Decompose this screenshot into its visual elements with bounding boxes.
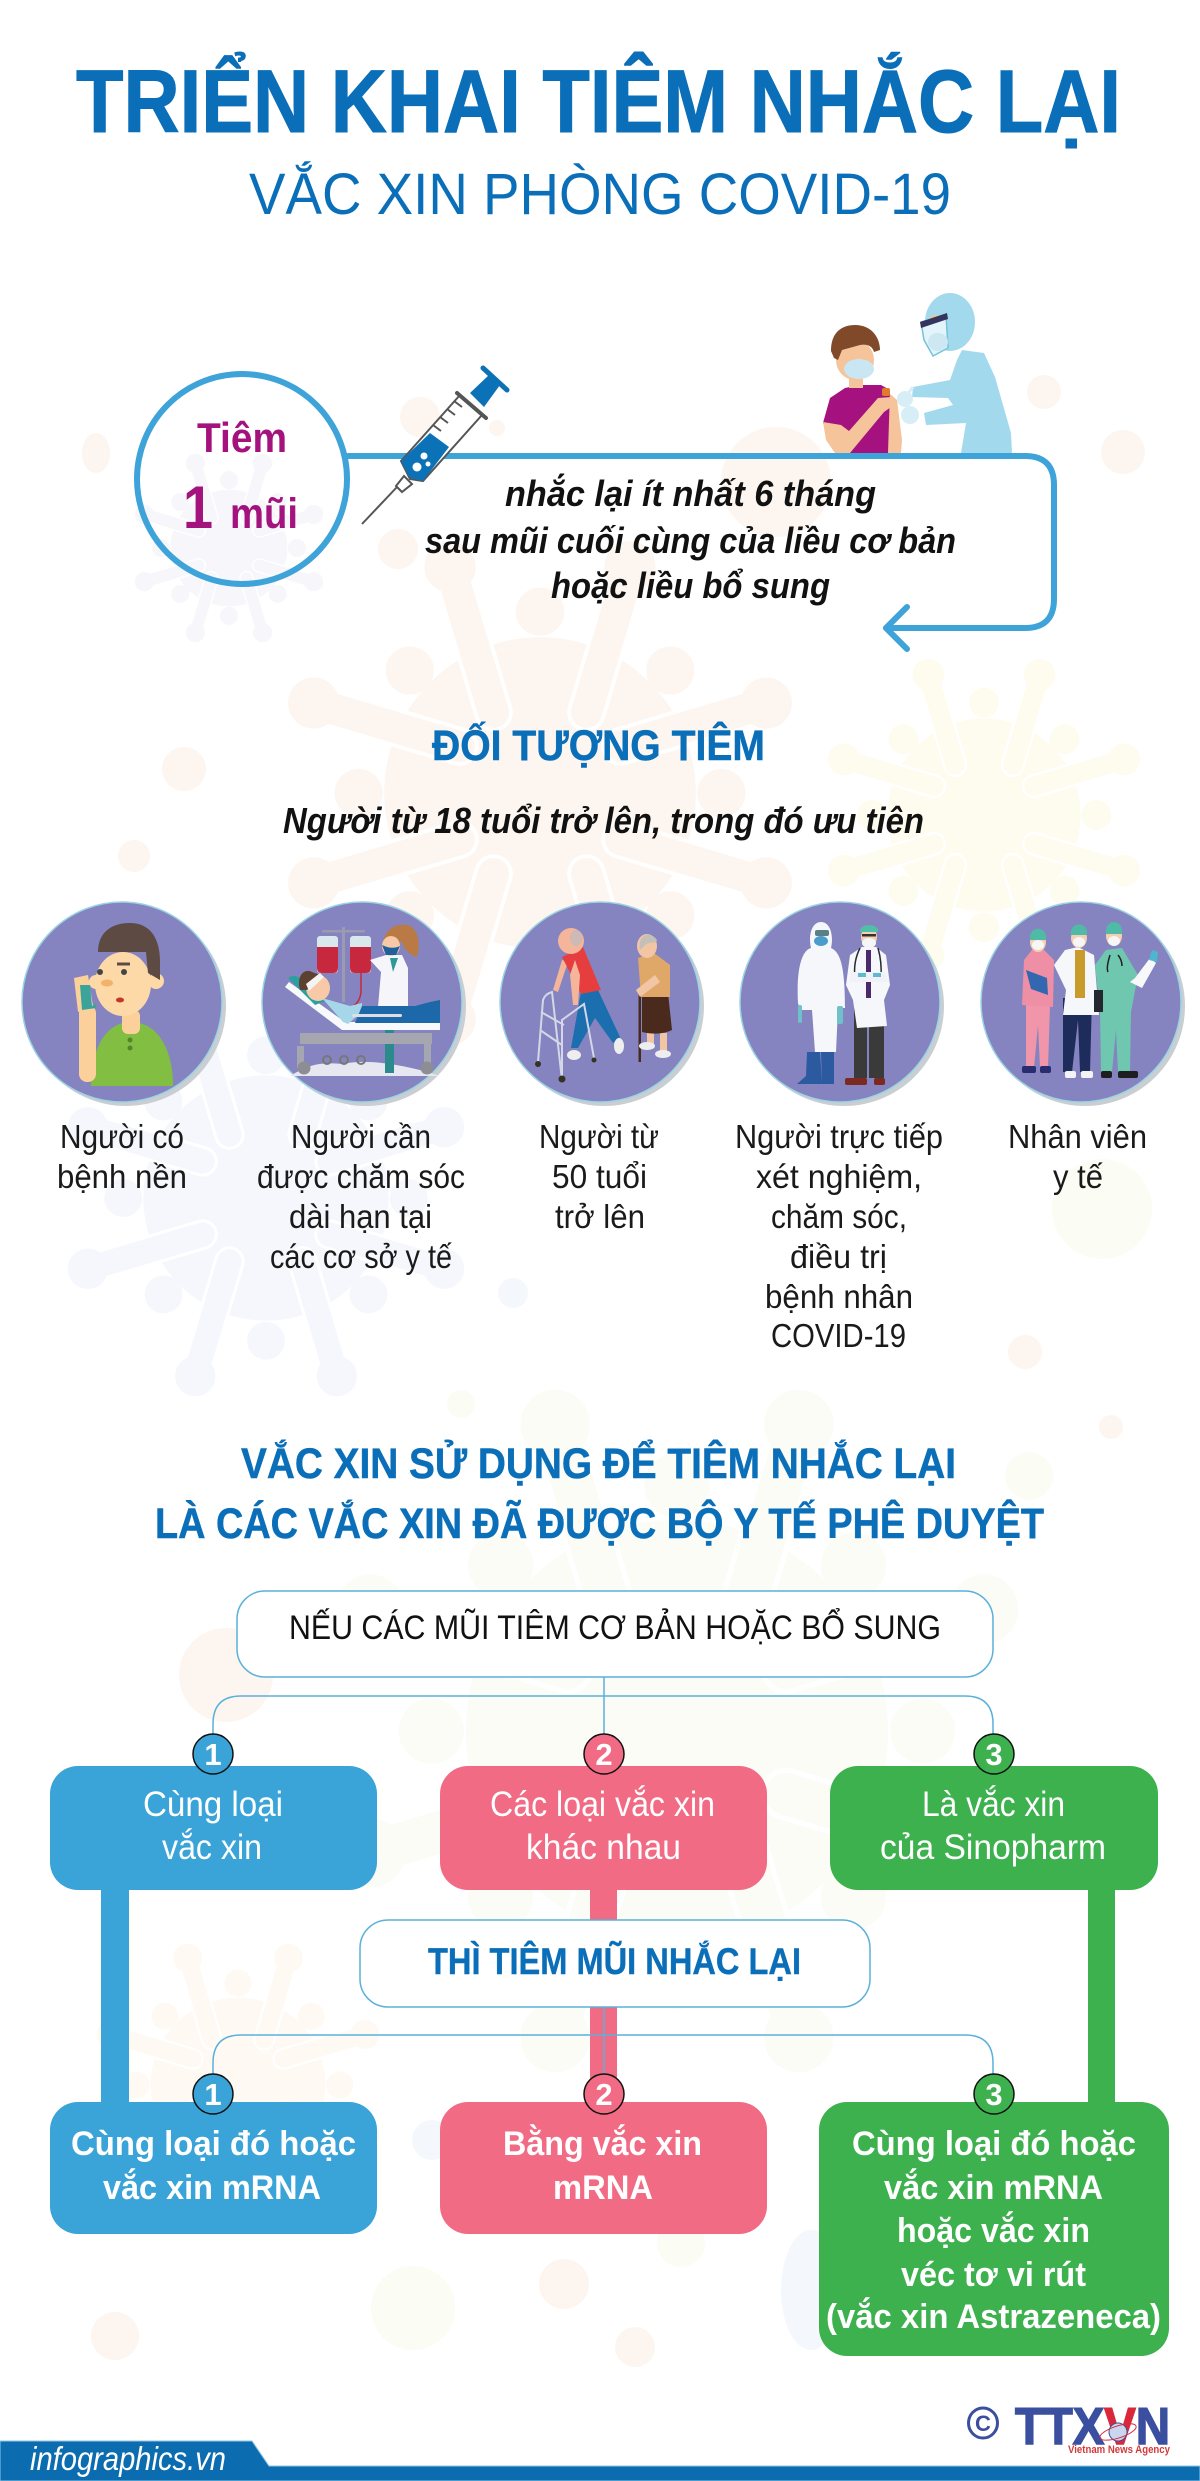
panel: same vaccine: Cùng loại xyxy=(143,1785,283,1824)
text block: booster timing xyxy=(425,472,956,606)
panel: long-term care xyxy=(257,902,466,1275)
panel: result mRNA xyxy=(440,2102,767,2234)
icon: three health workers xyxy=(981,902,1185,1106)
icon: patient in bed with nurse xyxy=(262,902,466,1106)
text block: booster timing: sau mũi cuối cùng của liều cơ bản xyxy=(425,520,956,561)
logo: TTXVN: C xyxy=(975,2411,991,2436)
label xyxy=(539,1118,659,1235)
label: Người có xyxy=(60,1118,184,1155)
icon: elderly people xyxy=(500,902,704,1106)
heading: approved vaccines: LÀ CÁC VẮC XIN ĐÃ ĐƯỢC BỘ Y TẾ PHÊ DUYỆT xyxy=(155,1499,1044,1548)
footer: brand band xyxy=(0,2440,1200,2481)
panel: medical staff xyxy=(981,902,1185,1195)
badge: bottom 2 xyxy=(584,2074,624,2114)
panel: result Astrazeneca xyxy=(819,2102,1169,2356)
panel: different vaccines xyxy=(440,1766,767,1890)
badge: top 1 xyxy=(193,1734,233,1774)
panel: result Astrazeneca: hoặc vắc xin xyxy=(897,2212,1090,2250)
panel: result Astrazeneca: véc tơ vi rút xyxy=(901,2256,1086,2294)
heading: approved vaccines xyxy=(155,1439,1044,1548)
panel: condition box xyxy=(237,1591,993,1677)
badge: top 3 xyxy=(974,1734,1014,1774)
label: xét nghiệm, xyxy=(756,1158,922,1195)
badge: bottom 1 xyxy=(193,2074,233,2114)
callout: one dose circle: Tiêm xyxy=(197,414,287,461)
text block: target group intro: Người từ 18 tuổi trở lên, trong đó ưu tiên xyxy=(283,800,924,841)
callout: one dose circle xyxy=(137,374,347,584)
panel: Sinopharm: Là vắc xin xyxy=(922,1785,1065,1824)
label: các cơ sở y tế xyxy=(270,1238,452,1275)
badge: bottom 3 xyxy=(974,2074,1014,2114)
panel: different vaccines: khác nhau xyxy=(526,1828,681,1867)
label: dài hạn tại xyxy=(289,1198,432,1235)
badge: bottom 2: 2 xyxy=(595,2077,613,2112)
panel: underlying conditions xyxy=(22,902,226,1195)
panel: same vaccine: vắc xin xyxy=(162,1828,262,1867)
icon: hazmat worker and doctor xyxy=(740,902,944,1106)
arrow: green path xyxy=(1088,1885,1115,2110)
text block: booster timing: hoặc liều bổ sung xyxy=(551,565,830,606)
subtitle: VẮC XIN PHÒNG COVID-19 xyxy=(249,162,951,227)
panel: result mRNA: Bằng vắc xin xyxy=(503,2125,702,2163)
label: COVID-19 xyxy=(771,1317,906,1354)
icon: person with inhaler xyxy=(22,902,226,1106)
badge: bottom 1: 1 xyxy=(204,2077,222,2112)
icon: syringe xyxy=(362,368,507,524)
heading: target group: ĐỐI TƯỢNG TIÊM xyxy=(432,721,765,770)
panel: Sinopharm: của Sinopharm xyxy=(880,1828,1106,1867)
label: bệnh nền xyxy=(57,1158,187,1195)
title xyxy=(76,51,1121,227)
heading: approved vaccines: VẮC XIN SỬ DỤNG ĐỂ TIÊM NHẮC LẠI xyxy=(241,1439,956,1488)
badge: top 1: 1 xyxy=(204,1737,222,1772)
label xyxy=(1008,1118,1147,1195)
panel: result Astrazeneca: (vắc xin Astrazeneca) xyxy=(826,2298,1161,2336)
callout: one dose circle: mũi xyxy=(230,490,298,538)
panel: result same or mRNA: Cùng loại đó hoặc xyxy=(71,2125,356,2163)
logo: TTXVN: TTXVN xyxy=(1015,2398,1170,2456)
panel: result Astrazeneca: vắc xin mRNA xyxy=(884,2169,1103,2207)
doctor xyxy=(897,293,1012,453)
arrow: booster timing path xyxy=(348,456,1054,649)
badge: bottom 3: 3 xyxy=(985,2077,1003,2112)
label: Người từ xyxy=(539,1118,659,1155)
label: Người cần xyxy=(291,1118,431,1155)
arrow: bottom connector xyxy=(213,2007,993,2075)
panel: result same or mRNA xyxy=(50,2102,377,2234)
label: Nhân viên xyxy=(1008,1118,1147,1155)
panel: Sinopharm xyxy=(830,1766,1158,1890)
panel: result Astrazeneca: Cùng loại đó hoặc xyxy=(852,2125,1136,2163)
label: được chăm sóc xyxy=(257,1158,465,1195)
label: y tế xyxy=(1053,1158,1103,1195)
label: chăm sóc, xyxy=(771,1198,907,1235)
panel: different vaccines: Các loại vắc xin xyxy=(490,1785,715,1824)
arrow: blue path xyxy=(101,1885,129,2110)
label xyxy=(735,1118,943,1354)
panel: aged 50 and over xyxy=(500,902,704,1235)
icon: vaccination illustration xyxy=(823,293,1012,453)
badge: top 2 xyxy=(584,1734,624,1774)
patient xyxy=(823,325,902,453)
label: điều trị xyxy=(790,1238,887,1275)
label: Người trực tiếp xyxy=(735,1118,943,1155)
footer: brand band: infographics.vn xyxy=(30,2440,226,2477)
panel: same vaccine xyxy=(50,1766,377,1890)
panel: booster box xyxy=(360,1920,870,2007)
badge: top 3: 3 xyxy=(985,1737,1003,1772)
panel: frontline staff xyxy=(735,902,944,1354)
label xyxy=(57,1118,187,1195)
panel: booster box: THÌ TIÊM MŨI NHẮC LẠI xyxy=(428,1940,801,1982)
panel: condition box: NẾU CÁC MŨI TIÊM CƠ BẢN HOẶC BỔ SUNG xyxy=(289,1609,941,1647)
label: bệnh nhân xyxy=(765,1278,913,1315)
arrow: top connector xyxy=(213,1677,993,1734)
text block: booster timing: nhắc lại ít nhất 6 tháng xyxy=(505,472,876,514)
label xyxy=(257,1118,465,1275)
background: faint virus pattern xyxy=(68,375,1152,2367)
label: trở lên xyxy=(555,1198,645,1235)
logo: TTXVN: Vietnam News Agency xyxy=(1068,2444,1171,2456)
badge: top 2: 2 xyxy=(595,1737,613,1772)
panel: result same or mRNA: vắc xin mRNA xyxy=(103,2169,321,2207)
callout: one dose circle: 1 xyxy=(183,474,213,541)
label: 50 tuổi xyxy=(552,1158,647,1195)
arrow: pink path xyxy=(590,1885,617,2110)
panel: result mRNA: mRNA xyxy=(553,2169,653,2207)
